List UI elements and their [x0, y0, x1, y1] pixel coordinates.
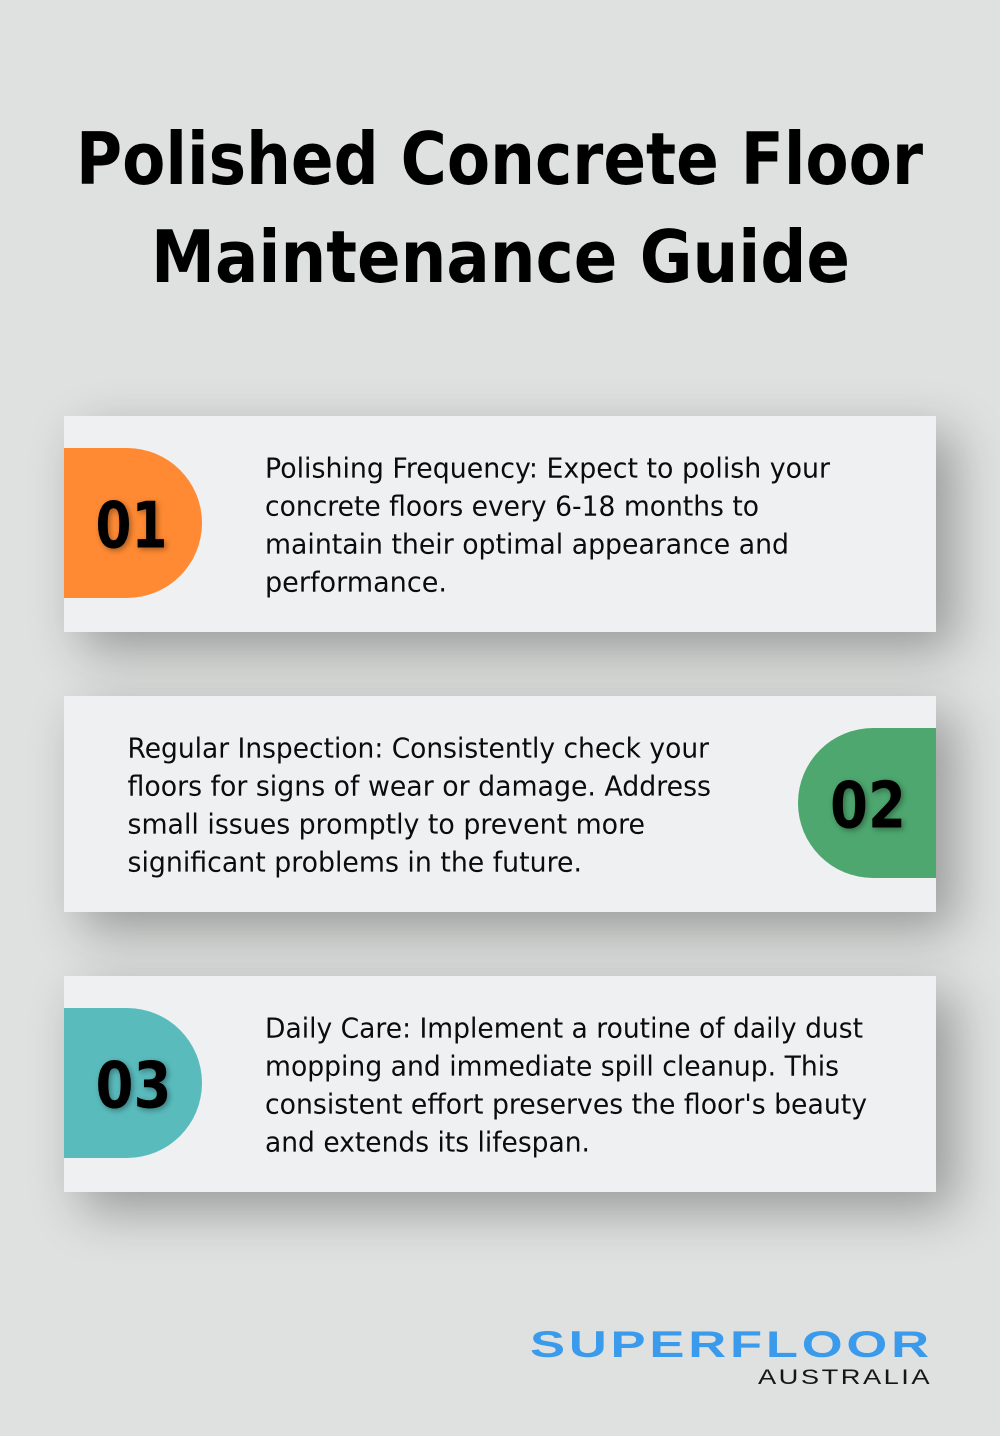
badge: 01 [64, 448, 202, 598]
text: regular inspection: significant problems in the future. [128, 846, 582, 878]
text: polishing frequency: performance. [265, 566, 447, 598]
text: daily care: consistent effort preserves the floor's beauty [265, 1088, 867, 1120]
title: Maintenance Guide [151, 215, 850, 299]
text: daily care: Daily Care: Implement a routine of daily dust [265, 1012, 863, 1044]
badge: 02: 02 [830, 770, 906, 844]
panel: step 01 [64, 448, 831, 598]
title [76, 117, 923, 299]
logo: Superfloor Australia [530, 1324, 930, 1389]
badge: 01: 01 [96, 490, 168, 564]
text: daily care: and extends its lifespan. [265, 1126, 590, 1158]
text: daily care [265, 1012, 867, 1158]
text: regular inspection: floors for signs of wear or damage. Address [128, 770, 711, 802]
text: polishing frequency: Polishing Frequency: Expect to polish your [265, 452, 831, 484]
panel: card 3 background [64, 976, 936, 1192]
panel: card 1 background [64, 416, 936, 632]
text: regular inspection: Regular Inspection: Consistently check your [128, 732, 710, 764]
badge: 03 [64, 1008, 202, 1158]
text: daily care: mopping and immediate spill cleanup. This [265, 1050, 839, 1082]
badge: 03: 03 [96, 1050, 172, 1124]
panel: card 2 background [64, 696, 936, 912]
badge: 02 [798, 728, 936, 878]
text: regular inspection: small issues promptly to prevent more [128, 808, 645, 840]
text: polishing frequency: concrete floors every 6-18 months to [265, 490, 759, 522]
text: polishing frequency: maintain their optimal appearance and [265, 528, 789, 560]
text: regular inspection [128, 732, 711, 878]
text: polishing frequency [265, 452, 831, 598]
panel: step 03 [64, 1008, 867, 1158]
logo: Superfloor Australia: SUPERFLOOR [530, 1324, 929, 1365]
panel: step 02 [128, 728, 936, 878]
logo: Superfloor Australia: AUSTRALIA [758, 1366, 930, 1389]
